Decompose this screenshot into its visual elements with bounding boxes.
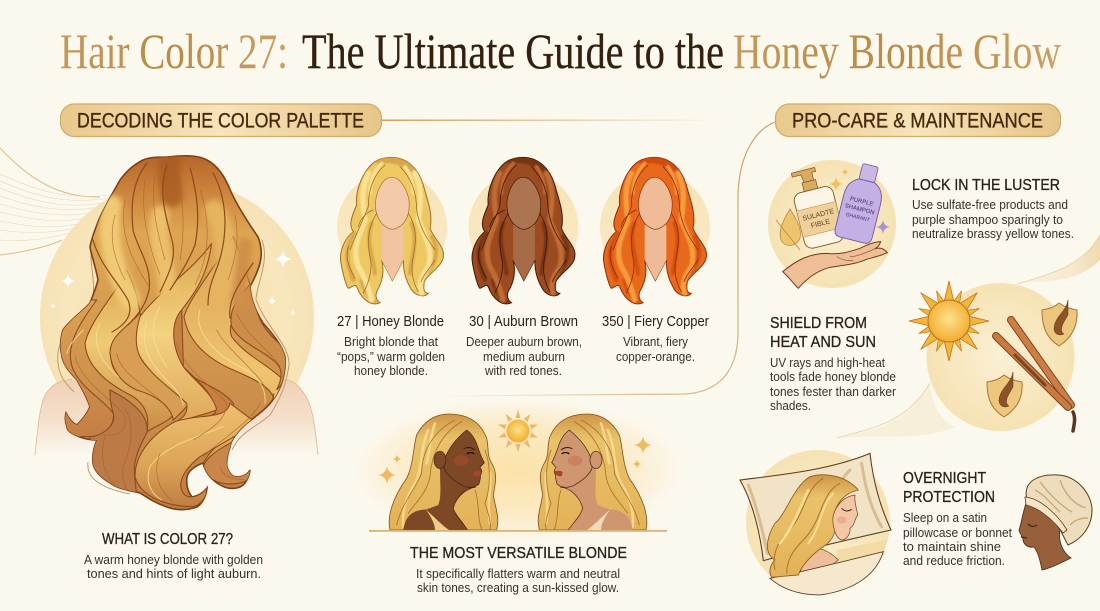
light strand streaks <box>67 307 265 500</box>
text block: overnight protection: Sleep on a satin <box>903 510 987 525</box>
text block: lock in the luster: LOCK IN THE LUSTER <box>912 177 1060 194</box>
swatch description <box>466 334 582 378</box>
text block: the most versatile blonde <box>410 545 627 595</box>
title <box>60 23 1061 79</box>
circle backdrop <box>468 172 578 282</box>
text block: what is color 27: tones and hints of light auburn. <box>87 567 261 581</box>
text block: overnight protection: to maintain shine <box>903 539 1001 554</box>
text block: what is color 27 <box>84 531 263 581</box>
text block: overnight protection: and reduce friction. <box>903 553 1005 568</box>
sheet <box>837 540 887 565</box>
swatch description: Bright blonde that <box>344 334 438 349</box>
hair <box>767 475 858 577</box>
swatch description: medium auburn <box>483 349 565 364</box>
right woman, warm skin tone <box>538 414 647 530</box>
hand <box>783 242 887 288</box>
circle backdrop <box>337 172 447 282</box>
sparkles <box>50 250 296 316</box>
bonnet <box>1026 475 1092 545</box>
heading pill: decoding the color palette <box>60 104 382 136</box>
text block: lock in the luster: purple shampoo sparingly to <box>912 212 1063 227</box>
text block: the most versatile blonde: THE MOST VERSATILE BLONDE <box>410 545 627 562</box>
wig illustration <box>603 157 706 304</box>
dark strand lines <box>75 313 280 502</box>
shoulders <box>35 379 318 455</box>
pillow <box>740 453 891 561</box>
white bottle: FIBLE <box>810 218 831 230</box>
title: Hair Color 27: <box>60 23 288 79</box>
decorative right swoosh <box>837 235 1100 438</box>
swatch description: with red tones. <box>484 363 562 378</box>
upper hair shading, softening the tops of the locks <box>110 158 245 300</box>
icon: woman wearing satin bonnet <box>1019 475 1092 570</box>
heading pill: pro-care and maintenance <box>776 104 1060 136</box>
left woman, deep skin tone <box>389 414 498 530</box>
purple bottle <box>834 161 889 245</box>
flyaway strands <box>58 240 289 494</box>
icon: sun, flat iron and shields <box>909 281 1077 431</box>
blanket <box>770 552 883 595</box>
swatch description <box>337 334 445 378</box>
title: The Ultimate Guide to the <box>302 23 724 79</box>
circle backdrop <box>600 172 710 282</box>
swatch: 30 auburn brown <box>466 157 582 378</box>
shoulder <box>800 548 838 575</box>
purple bottle: GHARANT <box>845 212 870 224</box>
swatch name: 30 | Auburn Brown <box>469 314 578 330</box>
text block: overnight protection: pillowcase or bonnet <box>903 525 1012 540</box>
text block: shield from heat and sun: shades. <box>770 398 811 413</box>
connector line from palette heading <box>382 120 717 121</box>
decorative left flowing lines <box>0 148 110 255</box>
glow circle behind hair <box>40 180 314 454</box>
text block: overnight protection <box>903 470 1012 568</box>
white bottle: SULADTE <box>802 208 835 223</box>
text block: shield from heat and sun: SHIELD FROM <box>770 315 867 332</box>
swatch description <box>616 334 695 364</box>
text block: what is color 27: A warm honey blonde with golden <box>84 553 263 567</box>
purple bottle: PURPLE <box>849 196 874 208</box>
white bottle <box>787 165 845 250</box>
text block: shield from heat and sun: tones fester than darker <box>770 384 897 399</box>
hair mass <box>61 156 285 510</box>
sparkles <box>829 177 843 191</box>
text block: lock in the luster <box>912 177 1074 241</box>
upper strand lines <box>93 163 253 332</box>
illustration: two women in sunlight <box>353 398 683 542</box>
purple bottle: SHAMPON <box>844 203 875 217</box>
flat iron <box>996 320 1075 431</box>
swatch description: copper-orange. <box>616 349 695 364</box>
swatch name: 350 | Fiery Copper <box>602 314 709 330</box>
text block: lock in the luster: neutralize brassy yellow tones. <box>912 226 1074 241</box>
wig illustration <box>472 157 575 304</box>
sun <box>909 281 989 361</box>
icon: woman sleeping on satin pillow <box>740 450 891 595</box>
swatch: 350 fiery copper <box>600 157 710 364</box>
swatch description: Vibrant, fiery <box>623 334 688 349</box>
text block: overnight protection: PROTECTION <box>903 489 995 506</box>
heading pill: decoding the color palette: DECODING THE COLOR PALETTE <box>77 110 364 132</box>
icon: shampoo bottles over hand <box>768 160 896 288</box>
heading pill: pro-care and maintenance: PRO-CARE & MAINTENANCE <box>792 110 1043 132</box>
sun <box>497 410 539 452</box>
main hair illustration: color 27 <box>35 156 318 510</box>
connector curve around palette <box>440 122 775 396</box>
shield bottom <box>987 372 1022 417</box>
text block: shield from heat and sun: HEAT AND SUN <box>770 334 876 351</box>
swatch: 27 honey blonde <box>337 157 447 378</box>
text block: the most versatile blonde: It specifically flatters warm and neutral <box>416 566 620 581</box>
oil drop <box>776 209 801 250</box>
swatch description: Deeper auburn brown, <box>466 334 582 349</box>
text block: shield from heat and sun <box>770 315 897 413</box>
text block: shield from heat and sun: tools fade honey blonde <box>770 369 896 384</box>
swatch description: “pops,” warm golden <box>337 349 445 364</box>
swatch name: 27 | Honey Blonde <box>337 314 444 330</box>
lower waves as filled locks <box>50 237 288 510</box>
text block: lock in the luster: Use sulfate-free products and <box>912 197 1068 212</box>
text block: overnight protection: OVERNIGHT <box>903 470 986 487</box>
swatch description: honey blonde. <box>354 363 428 378</box>
bonnet band <box>1025 497 1067 533</box>
sparkles <box>378 436 652 484</box>
text block: what is color 27: WHAT IS COLOR 27? <box>102 531 233 548</box>
neck and face <box>1019 500 1071 570</box>
face <box>833 495 858 540</box>
wig illustration <box>340 157 443 304</box>
text block: the most versatile blonde: skin tones, creating a sun-kissed glow. <box>417 580 619 595</box>
ground line <box>369 530 667 532</box>
shield top <box>1042 300 1077 346</box>
text block: shield from heat and sun: UV rays and high-heat <box>770 355 885 370</box>
